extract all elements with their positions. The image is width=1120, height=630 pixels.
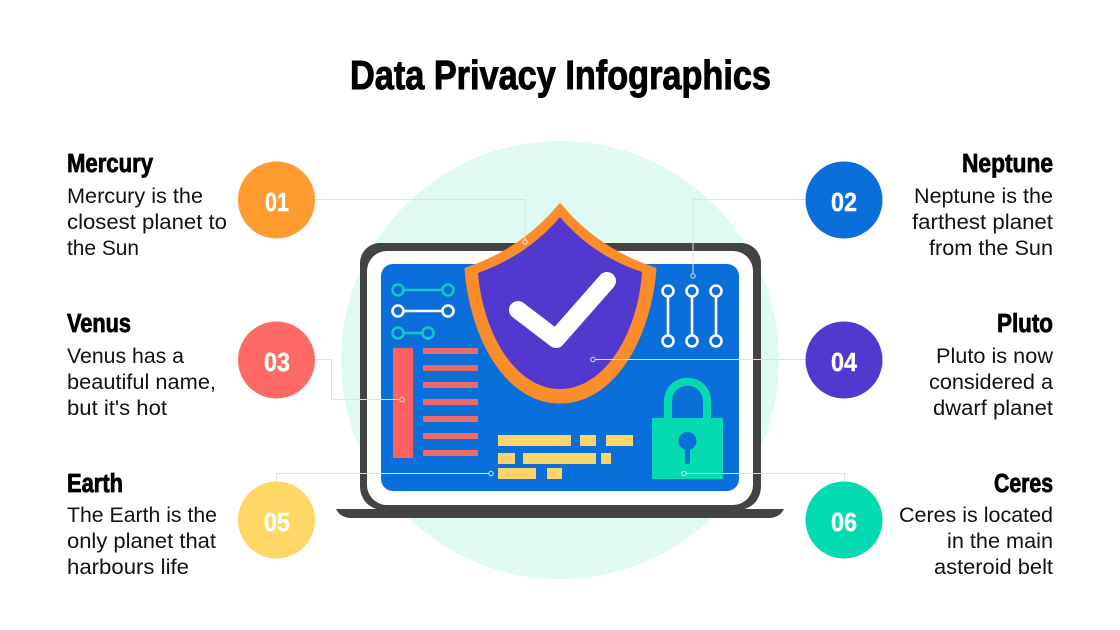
panel: Pluto (806, 310, 1054, 420)
panel: Neptune: 02 (831, 187, 857, 217)
yellow code blocks (498, 435, 633, 479)
panel: Venus: 03 (264, 347, 290, 377)
panel: Ceres: in the main (947, 530, 1053, 553)
panel: Earth: 05 (264, 507, 290, 537)
circuit icon: left connectors (392, 284, 454, 338)
icon: padlock (652, 382, 723, 479)
panel: Venus: Venus has a (67, 345, 184, 368)
panel: Mercury: closest planet to (67, 211, 227, 234)
laptop base (336, 509, 784, 518)
panel: Neptune: from the Sun (929, 237, 1053, 260)
laptop illustration (336, 205, 784, 518)
panel: Earth: only planet that (67, 530, 216, 553)
panel: Pluto: Pluto is now (936, 345, 1054, 368)
background circle (341, 141, 779, 579)
circuit icon: right connectors (662, 286, 722, 346)
connector lines (276, 200, 844, 482)
panel: Neptune: Neptune is the (914, 185, 1053, 208)
panel: Venus: Venus (67, 310, 131, 338)
panel: Venus: beautiful name, (67, 371, 216, 394)
panel: Earth (67, 470, 315, 579)
icon: shield with check mark (466, 205, 655, 402)
panel: Mercury: the Sun (67, 237, 139, 260)
panel: Mercury: Mercury (67, 150, 154, 178)
panel: Mercury: Mercury is the (67, 185, 203, 208)
panel: Neptune: farthest planet (912, 211, 1053, 234)
panel: Neptune (806, 150, 1053, 260)
panel: Earth: The Earth is the (67, 504, 217, 527)
panel: Pluto: dwarf planet (933, 397, 1053, 420)
panel: Mercury (67, 150, 315, 260)
panel: Ceres: Ceres is located (899, 504, 1053, 527)
panel: Ceres: Ceres (994, 470, 1053, 498)
panel: Venus (67, 310, 315, 420)
panel: Venus: but it's hot (67, 397, 167, 420)
panel: Mercury: 01 (265, 187, 289, 217)
panel: Earth: Earth (67, 470, 123, 498)
laptop screen (381, 264, 739, 491)
title: Data Privacy Infographics (350, 52, 771, 98)
panel: Earth: harbours life (67, 556, 189, 579)
panel: Pluto: Pluto (997, 310, 1053, 338)
panel: Ceres: 06 (831, 507, 857, 537)
panel: Pluto: 04 (831, 347, 857, 377)
laptop bezel (367, 251, 753, 505)
laptop frame (360, 243, 761, 510)
red data bar and lines (393, 348, 478, 458)
panel: Neptune: Neptune (962, 150, 1053, 178)
panel: Pluto: considered a (929, 371, 1053, 394)
panel: Ceres: asteroid belt (934, 556, 1053, 579)
panel: Ceres (806, 470, 1053, 579)
